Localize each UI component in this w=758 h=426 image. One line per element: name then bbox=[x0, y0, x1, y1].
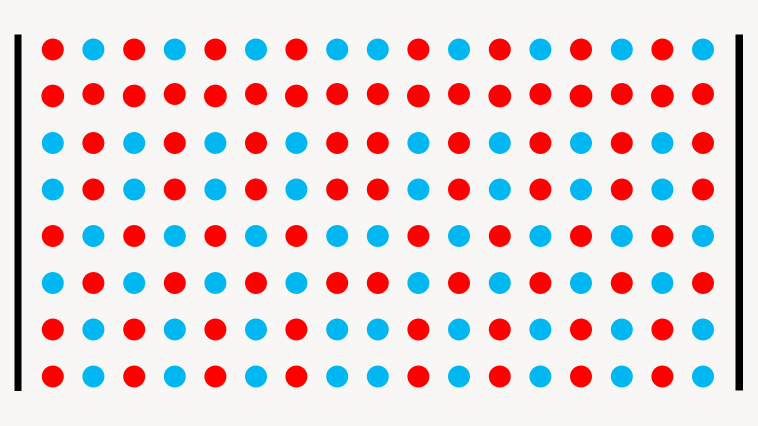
row 1 of dots bbox=[42, 38, 714, 60]
row 7 of dots bbox=[42, 318, 714, 340]
row 4 of dots bbox=[42, 178, 714, 200]
row 2 of dots bbox=[41, 83, 714, 107]
left black bar bbox=[14, 34, 22, 391]
row 8 of dots bbox=[42, 366, 714, 388]
row 5 of dots bbox=[42, 225, 714, 247]
row 3 of dots bbox=[42, 132, 714, 154]
right black bar bbox=[736, 34, 743, 390]
row 6 of dots bbox=[42, 272, 714, 294]
